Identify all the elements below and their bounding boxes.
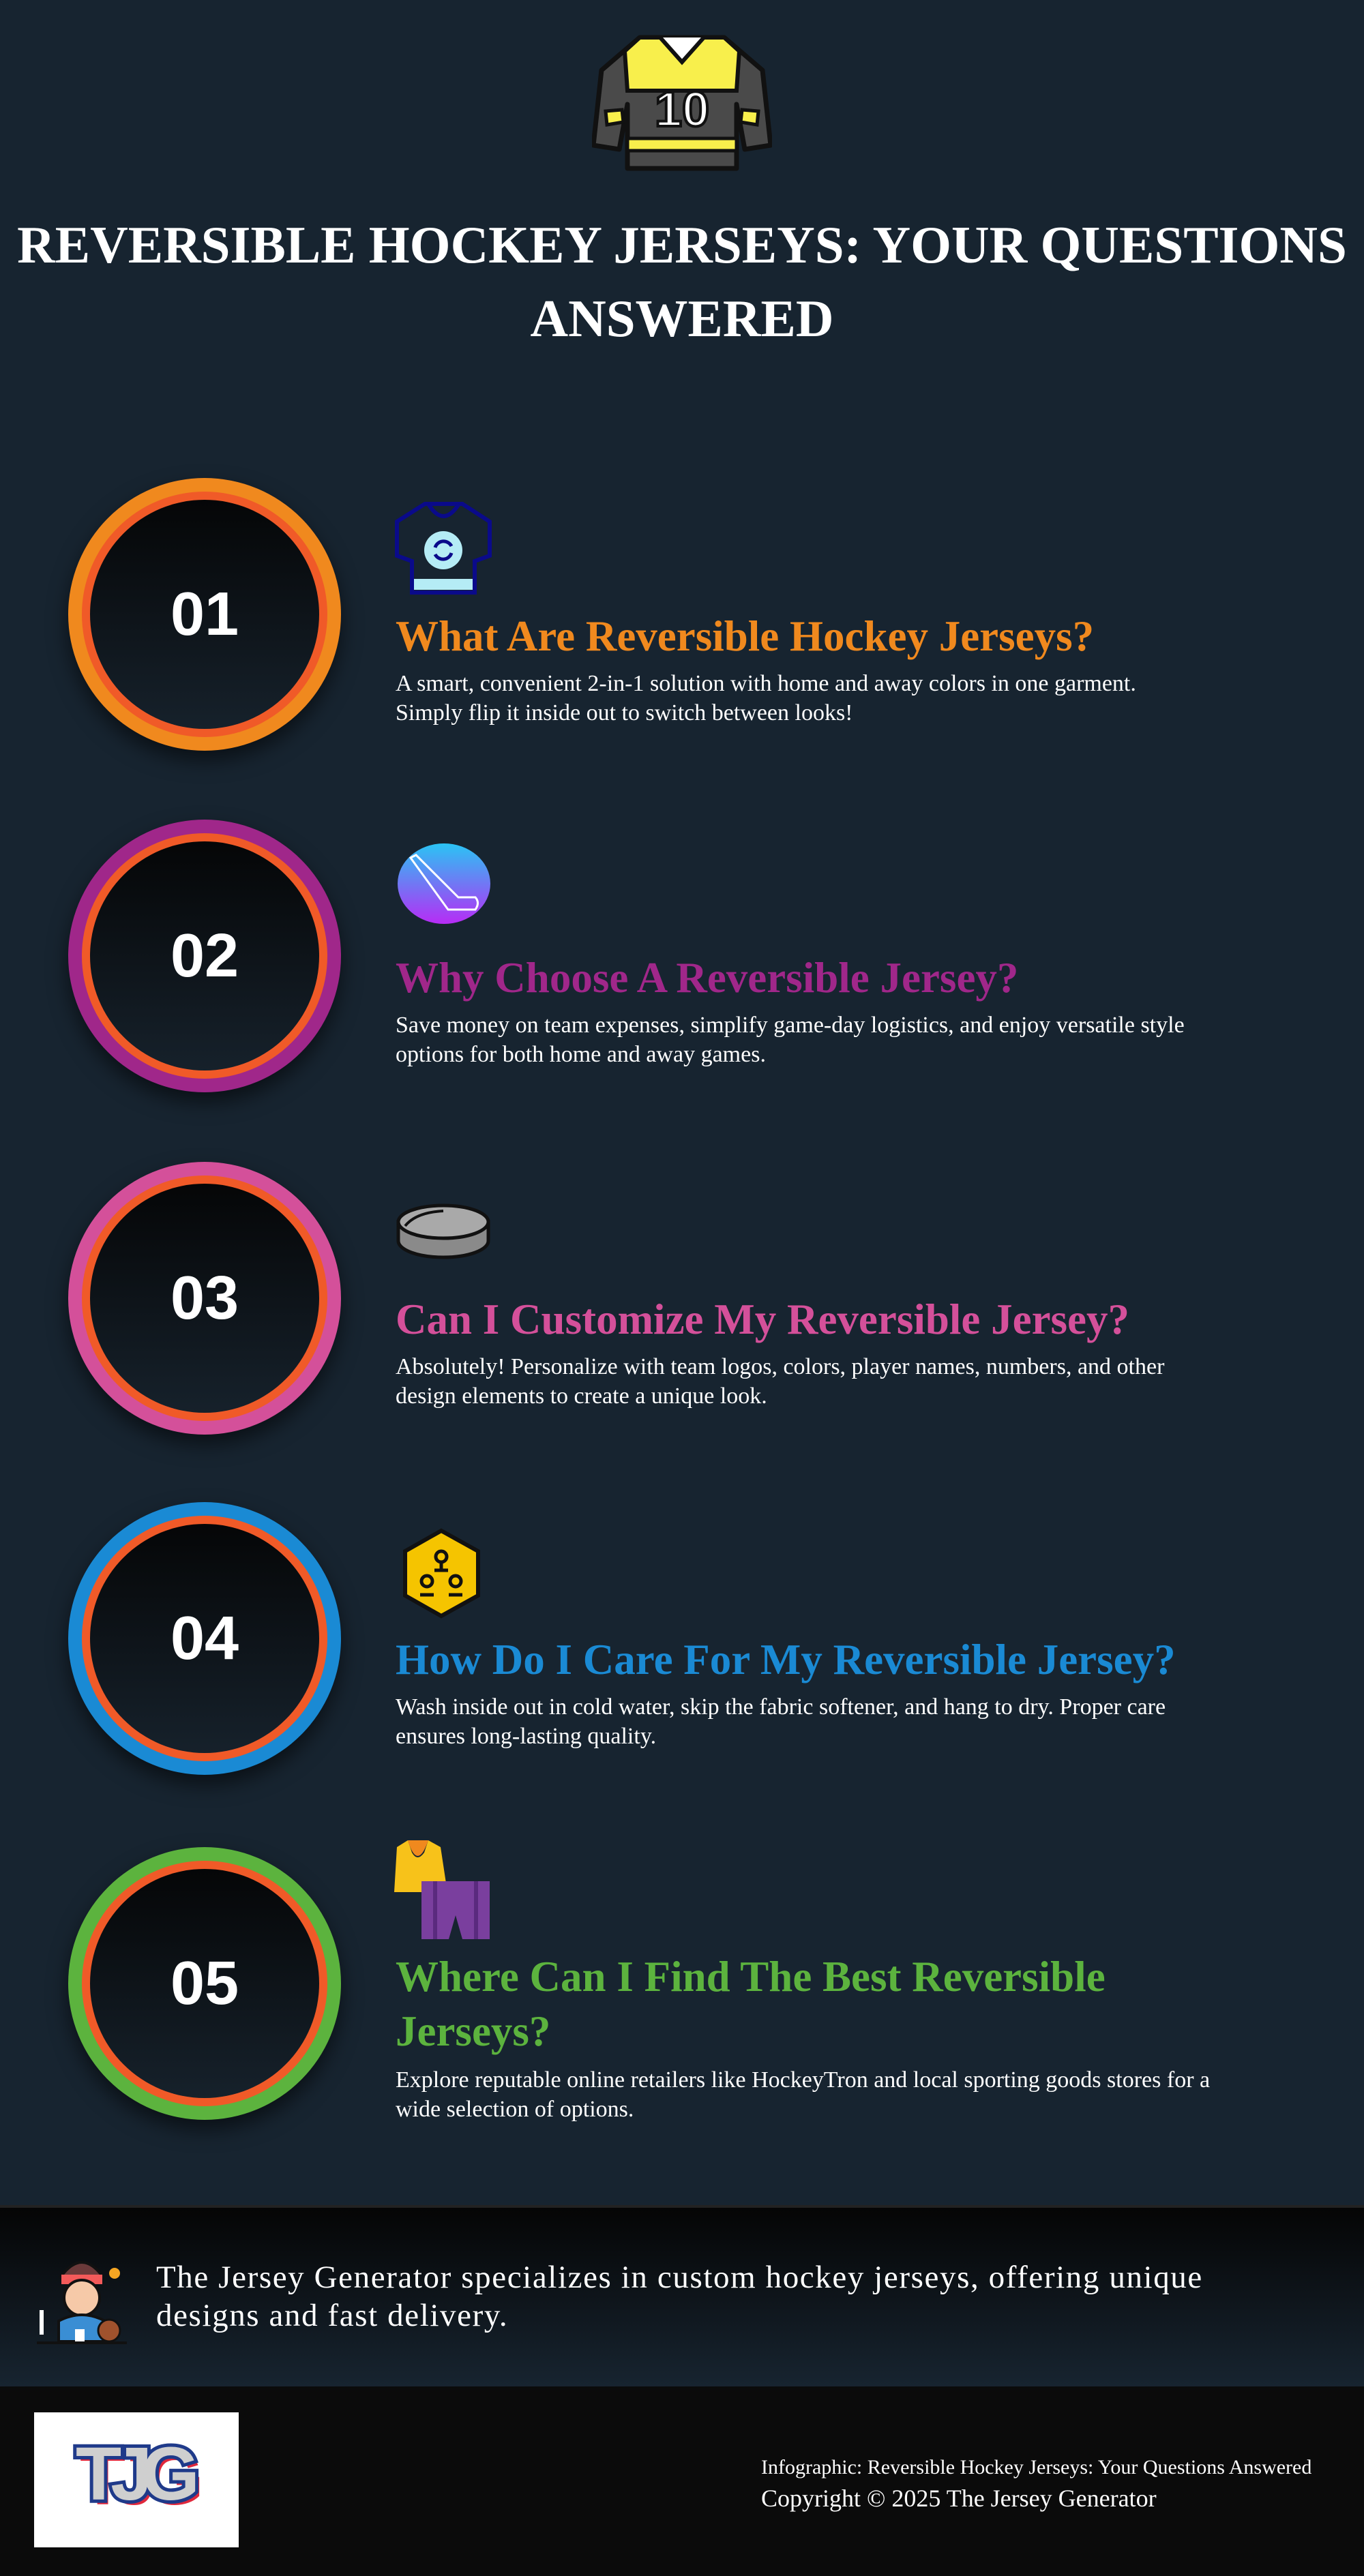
text 05: wide selection of options.	[396, 2097, 634, 2122]
icon: hockey stick	[398, 843, 490, 924]
circle 02	[68, 820, 341, 1092]
title: REVERSIBLE HOCKEY JERSEYS: YOUR QUESTIONS	[17, 215, 1347, 274]
circle 03	[68, 1162, 341, 1435]
bottom footer	[0, 2386, 1364, 2576]
footer banner	[0, 2205, 1364, 2386]
text 02	[396, 1013, 1185, 1067]
circle 05: 05	[170, 1949, 239, 2017]
text 05	[396, 2067, 1210, 2122]
icon: hockey jersey: 10	[655, 83, 709, 137]
icon: team hexagon	[403, 1529, 480, 1619]
circle 01: 01	[170, 580, 239, 648]
heading 05: Where Can I Find The Best Reversible	[396, 1953, 1106, 2001]
text 01: A smart, convenient 2-in-1 solution with home and away colors in one garment.	[396, 671, 1136, 696]
circle 01	[68, 478, 341, 751]
icon: hockey jersey	[592, 35, 772, 170]
text 04: Wash inside out in cold water, skip the fabric softener, and hang to dry. Proper care	[396, 1694, 1166, 1720]
icon: uniform	[394, 1840, 490, 1939]
text 02: options for both home and away games.	[396, 1042, 766, 1067]
circle 03: 03	[170, 1264, 239, 1332]
text 04: ensures long-lasting quality.	[396, 1724, 656, 1749]
credits	[761, 2456, 1311, 2512]
circle 04: 04	[170, 1604, 239, 1672]
circle 05	[68, 1847, 341, 2120]
logo: TJG	[76, 2432, 195, 2516]
text 03: Absolutely! Personalize with team logos, colors, player names, numbers, and other	[396, 1354, 1164, 1379]
heading 04: How Do I Care For My Reversible Jersey?	[396, 1636, 1176, 1683]
credits: Infographic: Reversible Hockey Jerseys: Your Questions Answered	[761, 2456, 1311, 2478]
logo	[34, 2412, 239, 2547]
heading 05	[396, 1953, 1106, 2055]
footer text: designs and fast delivery.	[156, 2298, 508, 2333]
heading 05: Jerseys?	[396, 2007, 550, 2055]
circle 02: 02	[170, 922, 239, 990]
logo: TJG	[80, 2437, 199, 2521]
text 05: Explore reputable online retailers like HockeyTron and local sporting goods stores for a	[396, 2067, 1210, 2093]
text 03	[396, 1354, 1165, 1409]
footer text: The Jersey Generator specializes in custom hockey jerseys, offering unique	[156, 2260, 1203, 2295]
title: ANSWERED	[531, 289, 833, 348]
heading 02: Why Choose A Reversible Jersey?	[396, 954, 1018, 1002]
text 01	[396, 671, 1136, 725]
icon: player	[37, 2264, 127, 2344]
text 02: Save money on team expenses, simplify game-day logistics, and enjoy versatile style	[396, 1013, 1185, 1038]
circle 04	[68, 1502, 341, 1775]
heading 03: Can I Customize My Reversible Jersey?	[396, 1296, 1129, 1343]
text 04	[396, 1694, 1166, 1749]
text 03: design elements to create a unique look.	[396, 1383, 767, 1409]
icon: puck	[397, 1204, 490, 1259]
heading 01: What Are Reversible Hockey Jerseys?	[396, 612, 1094, 660]
credits: Copyright © 2025 The Jersey Generator	[761, 2485, 1157, 2512]
icon: reversible shirt	[395, 502, 492, 595]
text 01: Simply flip it inside out to switch between looks!	[396, 700, 853, 725]
footer text	[156, 2260, 1203, 2333]
title	[17, 215, 1347, 348]
